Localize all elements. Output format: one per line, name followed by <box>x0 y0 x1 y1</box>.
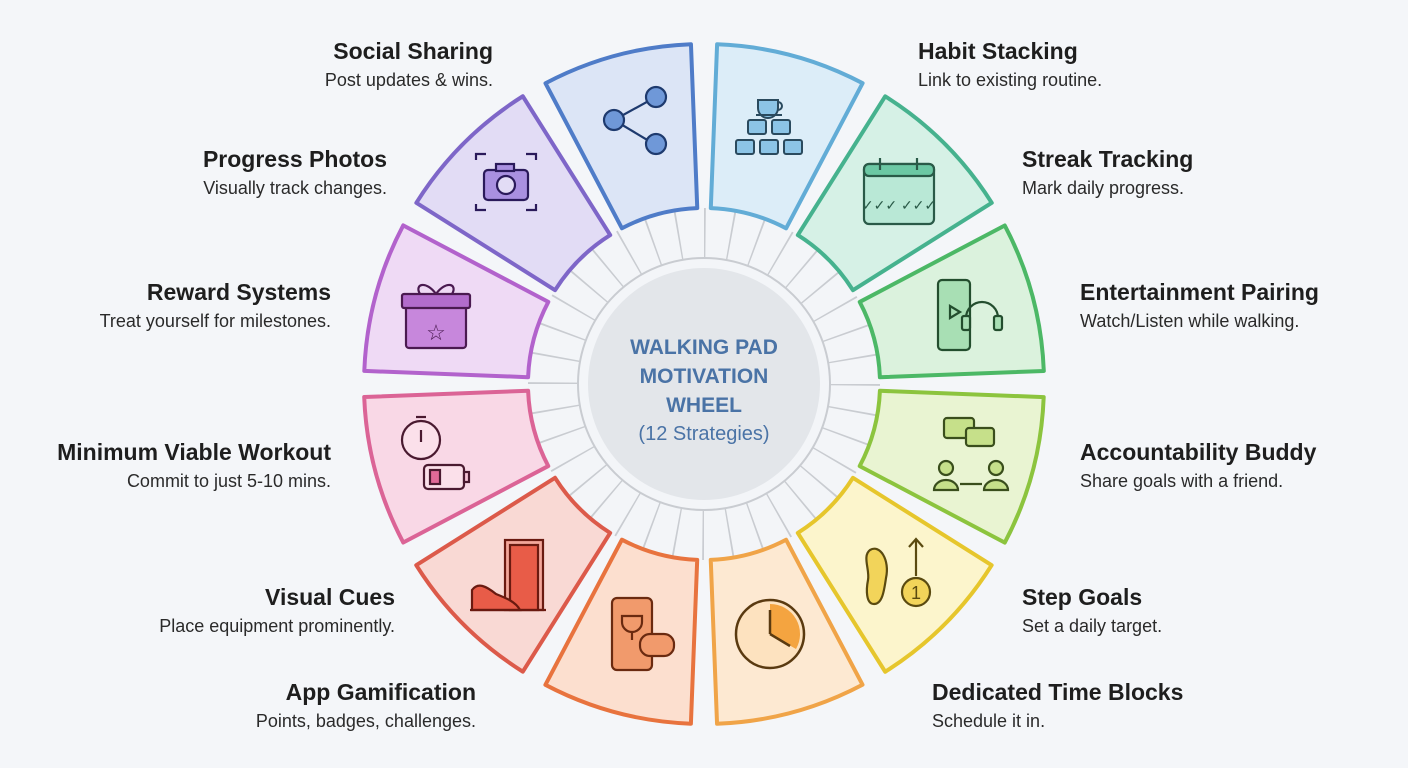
label: visual cues <box>159 584 395 636</box>
label: social sharing: Social Sharing <box>333 38 493 64</box>
label: step goals: Step Goals <box>1022 584 1142 610</box>
label: progress photos <box>203 146 387 198</box>
icon: camera <box>476 154 536 210</box>
label: accountability buddy: Accountability Buddy <box>1080 439 1317 465</box>
label: social sharing <box>325 38 493 90</box>
label: step goals: Set a daily target. <box>1022 616 1162 636</box>
label: visual cues: Visual Cues <box>265 584 395 610</box>
center hub: MOTIVATION <box>640 365 768 388</box>
label: progress photos: Progress Photos <box>203 146 387 172</box>
icon: calendar <box>862 158 936 224</box>
icon: accountability <box>934 418 1008 490</box>
label: streak tracking: Mark daily progress. <box>1022 178 1184 198</box>
wheel segments <box>331 11 1077 757</box>
label: accountability buddy <box>1080 439 1317 491</box>
center hub <box>578 258 830 510</box>
icon: calendar: ✓✓✓ ✓✓✓ <box>862 197 936 213</box>
label: streak tracking: Streak Tracking <box>1022 146 1193 172</box>
icon: stopwatch battery <box>402 417 469 489</box>
label: minimum viable workout: Minimum Viable Workout <box>57 439 331 465</box>
label: reward systems: Reward Systems <box>147 279 331 305</box>
icon: clock <box>736 600 804 668</box>
label: progress photos: Visually track changes. <box>203 178 387 198</box>
icon: tablet headphones <box>938 280 1002 350</box>
label: streak tracking <box>1022 146 1193 198</box>
icon: gift: ☆ <box>426 320 446 345</box>
icon: gift <box>402 285 470 348</box>
label: social sharing: Post updates & wins. <box>325 70 493 90</box>
icon: footprints: 1 <box>911 583 921 603</box>
center hub: WHEEL <box>666 394 742 417</box>
label: dedicated time blocks: Dedicated Time Blocks <box>932 679 1183 705</box>
label: minimum viable workout: Commit to just 5-10 mins. <box>127 471 331 491</box>
label: app gamification: App Gamification <box>286 679 476 705</box>
label: dedicated time blocks: Schedule it in. <box>932 711 1045 731</box>
label: minimum viable workout <box>57 439 331 491</box>
icon: habit stacking <box>736 100 802 154</box>
center hub: WALKING PAD <box>630 336 778 359</box>
icon: share <box>604 87 666 154</box>
label: accountability buddy: Share goals with a friend. <box>1080 471 1283 491</box>
label: entertainment pairing <box>1080 279 1319 331</box>
label: habit stacking: Habit Stacking <box>918 38 1078 64</box>
label: app gamification: Points, badges, challenges. <box>256 711 476 731</box>
label: visual cues: Place equipment prominently. <box>159 616 395 636</box>
label: step goals <box>1022 584 1162 636</box>
spoke ring <box>528 208 880 560</box>
icon: phone game <box>612 598 674 670</box>
label: app gamification <box>256 679 476 731</box>
label: reward systems <box>100 279 331 331</box>
label: habit stacking: Link to existing routine. <box>918 70 1102 90</box>
label: entertainment pairing: Entertainment Pairing <box>1080 279 1319 305</box>
center hub: (12 Strategies) <box>638 423 770 445</box>
label: reward systems: Treat yourself for milestones. <box>100 311 331 331</box>
icon: shoe door <box>470 540 546 610</box>
label: dedicated time blocks <box>932 679 1183 731</box>
label: habit stacking <box>918 38 1102 90</box>
icon: footprints <box>866 539 930 606</box>
label: entertainment pairing: Watch/Listen while walking. <box>1080 311 1299 331</box>
